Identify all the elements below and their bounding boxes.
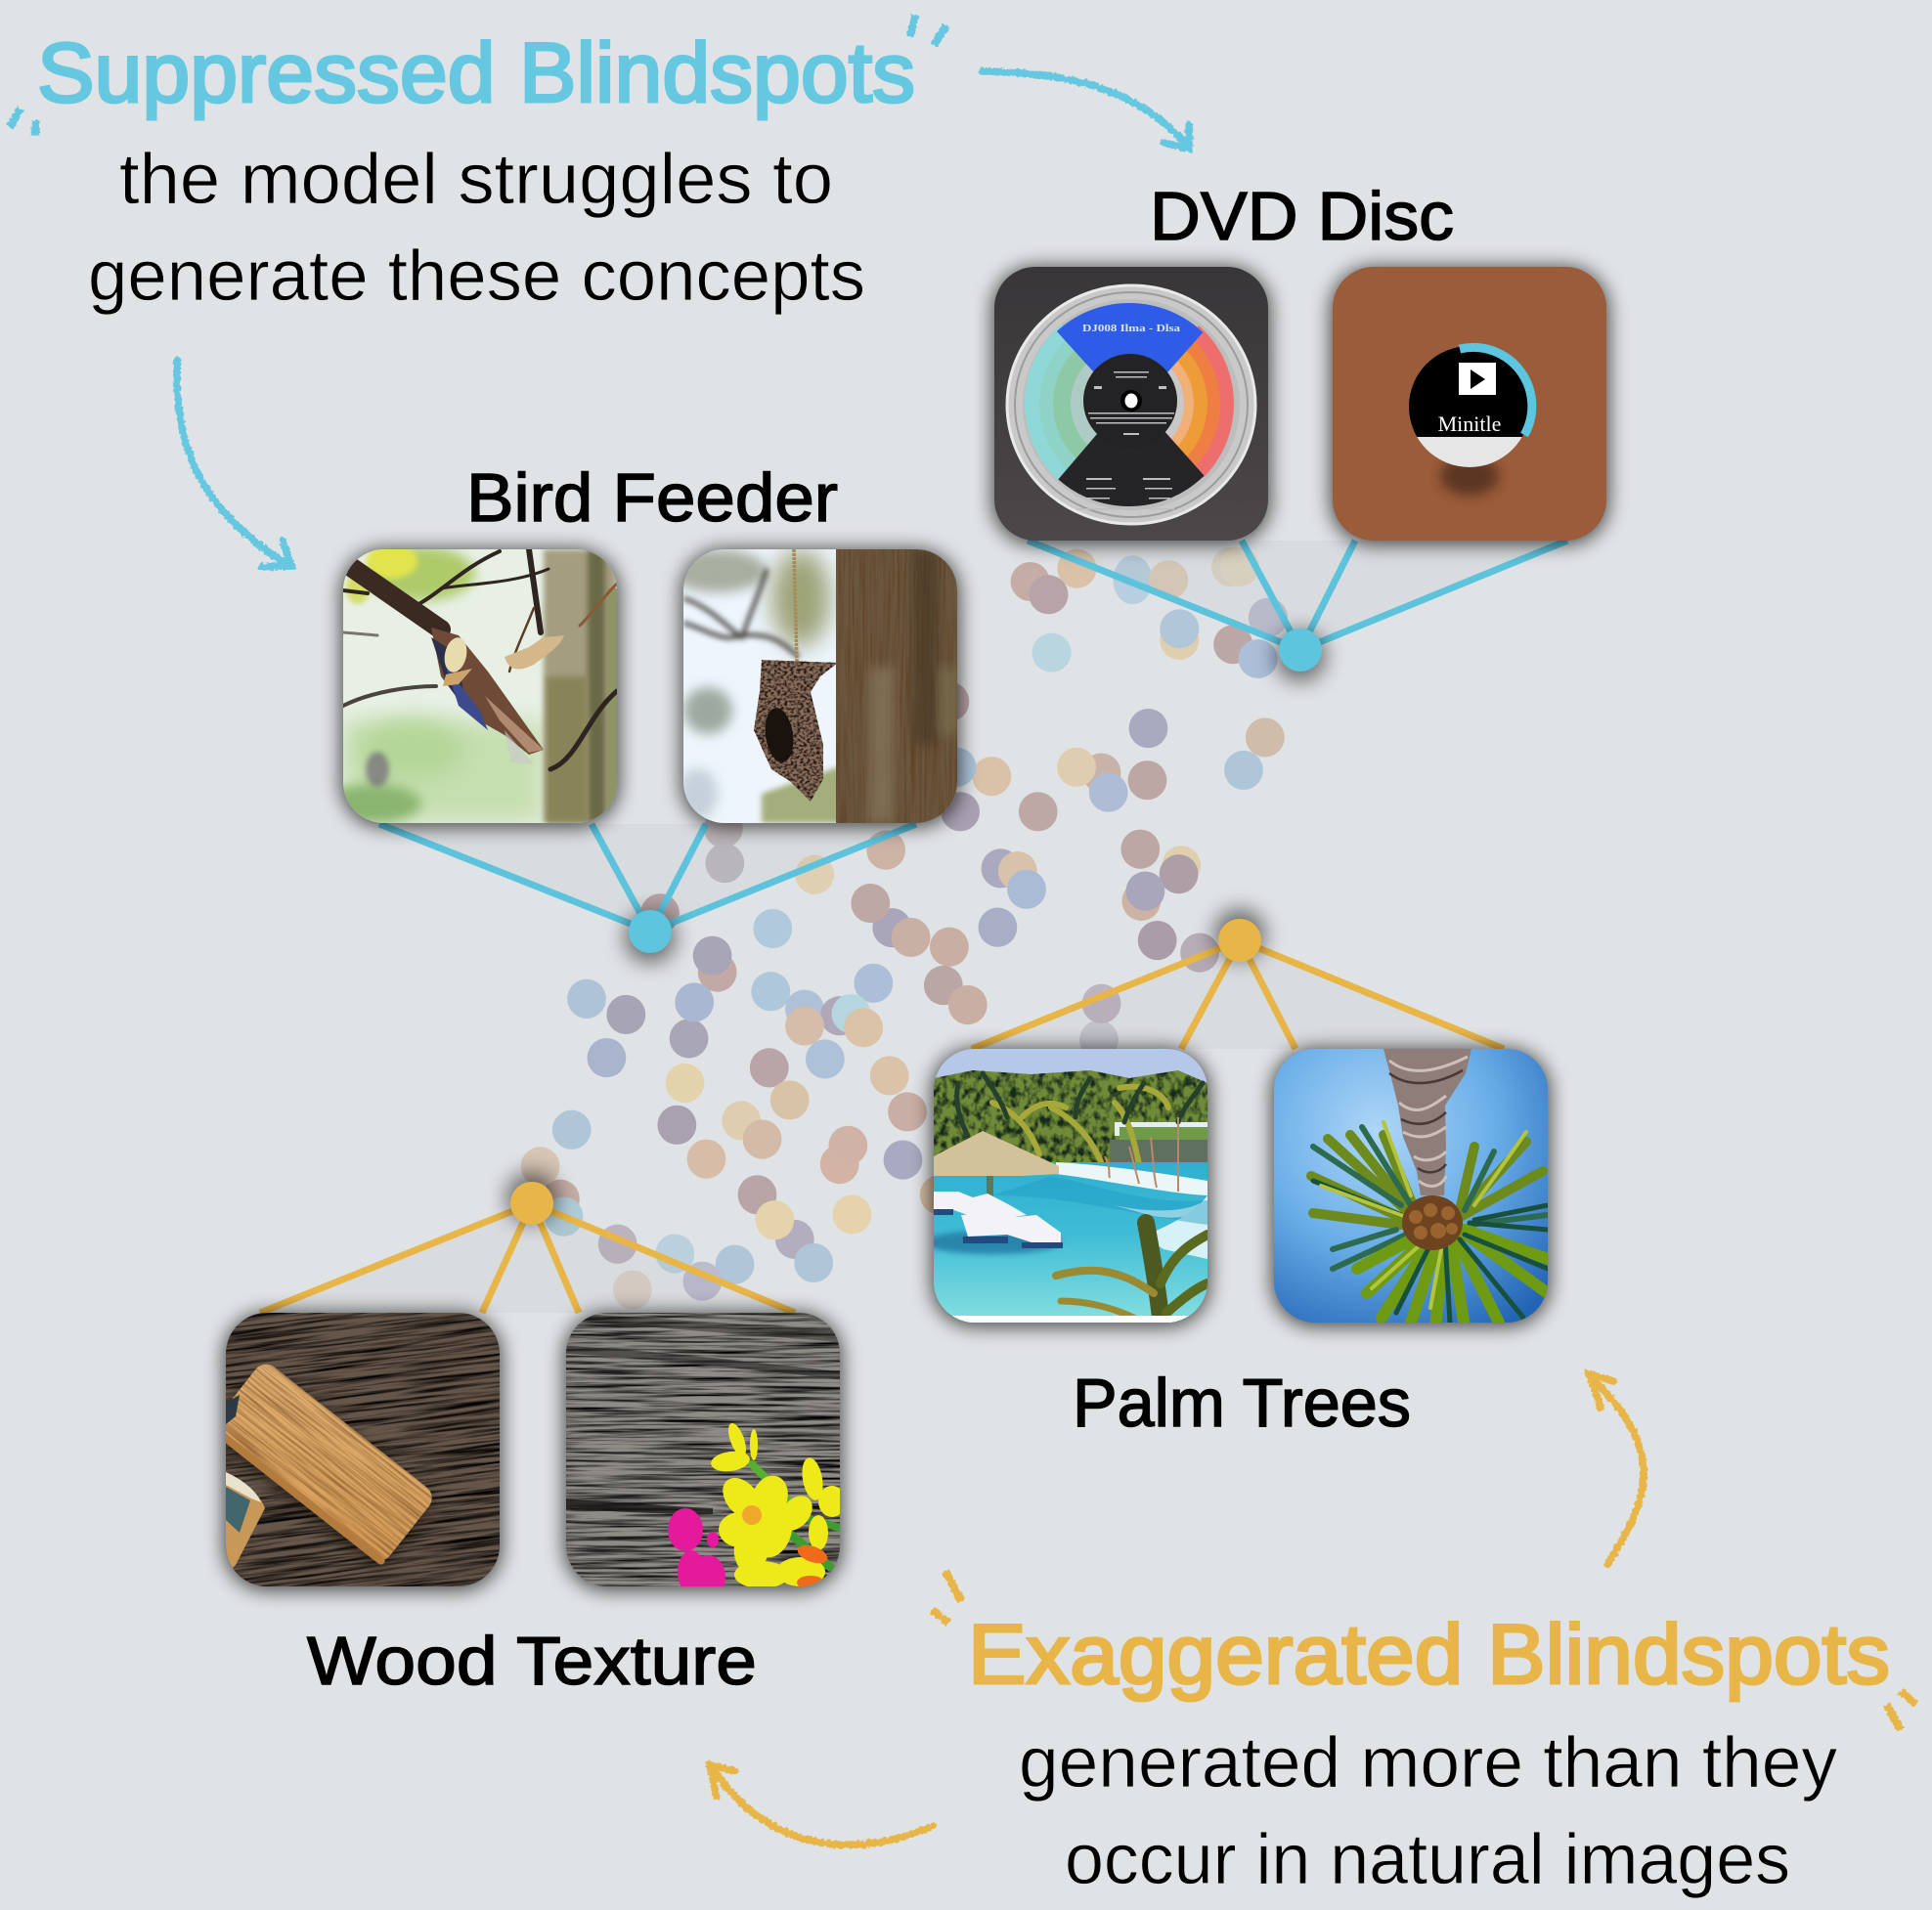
cluster: DVD Disc: [992, 178, 1608, 681]
label: Wood Texture: Wood Texture: [307, 1623, 757, 1699]
arrow: suppressed to DVD Disc: [982, 71, 1189, 149]
connector fan: [1028, 541, 1567, 650]
image: wooden phone case on table: [208, 1297, 517, 1606]
node: [625, 910, 676, 963]
image: palm tree from below: [1272, 1049, 1550, 1327]
text: suppressed description line 1: the model struggles to: [119, 140, 833, 219]
label: Bird Feeder: Bird Feeder: [466, 459, 838, 536]
image: tropical resort pool: [924, 1049, 1209, 1326]
connector fan: [972, 940, 1504, 1049]
label: Palm Trees: Palm Trees: [1073, 1365, 1411, 1441]
text: exaggerated description line 2: occur in natural images: [1065, 1820, 1790, 1899]
cluster: Bird Feeder: [324, 459, 959, 963]
node: [1275, 629, 1326, 681]
image: disc on dark background: [992, 267, 1270, 544]
heading: exaggerated blindspots: Exaggerated Blindspots: [968, 1608, 1890, 1702]
image: hanging feeder: [669, 549, 959, 827]
arrow: exaggerated to Wood Texture: [710, 1765, 933, 1845]
cluster: Wood Texture: [166, 1172, 846, 1699]
text: exaggerated description line 1: generated more than they: [1019, 1723, 1837, 1802]
image: disc on brown background: [1331, 267, 1608, 544]
sparks: around suppressed heading: [10, 15, 946, 136]
node: [1214, 909, 1265, 962]
image: weathered wood with flowers: [564, 1313, 846, 1598]
image: disc on brown background: Minitle: [1438, 412, 1501, 436]
connector fan: [260, 1203, 795, 1313]
arrow: suppressed to Bird Feeder: [177, 360, 291, 567]
image: disc on dark background: DJ008 Ilma - Dlsa: [1082, 323, 1181, 334]
sparks: around exaggerated heading: [932, 1571, 1916, 1730]
image: bird on branch: [324, 543, 619, 827]
cluster: Palm Trees: [924, 909, 1550, 1441]
text: suppressed description line 2: generate these concepts: [88, 237, 865, 316]
label: DVD Disc: DVD Disc: [1150, 178, 1454, 254]
heading: suppressed blindspots: Suppressed Blindspots: [37, 26, 915, 120]
node: [506, 1172, 557, 1225]
arrow: exaggerated to Palm Trees: [1590, 1374, 1644, 1564]
scatter of concept dots: [521, 547, 1288, 1310]
connector fan: [379, 824, 916, 932]
